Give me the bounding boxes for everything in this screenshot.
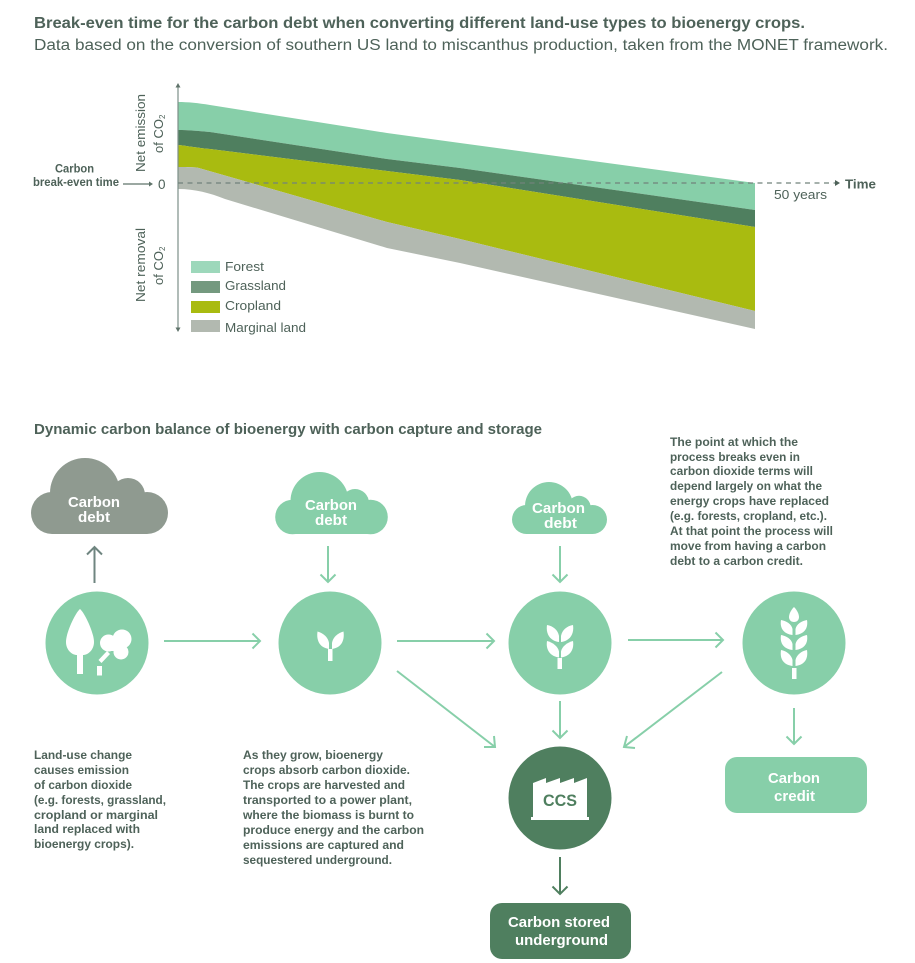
arrow: mature crop to CCS xyxy=(624,672,722,748)
text: bioenergy crops explanation: transported to a power plant, xyxy=(243,793,412,807)
box: carbon credit: Carbon xyxy=(768,770,820,787)
area: forest xyxy=(178,102,755,210)
cloud: grey carbon debt xyxy=(31,458,168,534)
cloud: small carbon debt: debt xyxy=(544,515,577,532)
axis label: of CO2 lower: of CO xyxy=(151,251,166,285)
legend: Cropland xyxy=(225,298,281,313)
cloud: grey carbon debt: Carbon xyxy=(68,494,120,511)
subtitle: data source: Data based on the conversion of southern US land to miscanthus production, taken from the MONET framework. xyxy=(34,37,888,54)
arrow: cloud to young crop xyxy=(552,546,568,582)
arrow: young crop to CCS xyxy=(552,701,568,738)
box: carbon credit: credit xyxy=(774,788,815,805)
cloud: medium carbon debt xyxy=(275,472,388,534)
text: break-even point explanation: move from having a carbon xyxy=(670,539,826,553)
text: break-even point explanation: debt to a carbon credit. xyxy=(670,554,803,568)
text: break-even point explanation xyxy=(670,435,833,568)
axis label: net emission: Net emission xyxy=(133,94,148,172)
label: carbon break-even time: break-even time xyxy=(33,175,119,189)
arrow: seedling to CCS xyxy=(397,671,495,747)
text: land-use change explanation: land replaced with xyxy=(34,822,140,836)
box: carbon stored underground: underground xyxy=(515,932,608,949)
text: bioenergy crops explanation xyxy=(242,748,424,867)
text: bioenergy crops explanation: where the biomass is burnt to xyxy=(242,808,414,822)
label: zero: 0 xyxy=(158,177,166,192)
text: bioenergy crops explanation: produce energy and the carbon xyxy=(243,823,424,837)
arrow: CCS to stored underground xyxy=(552,857,568,894)
text: land-use change explanation: causes emission xyxy=(34,763,129,777)
legend: Forest xyxy=(225,259,264,274)
text: bioenergy crops explanation: emissions are captured and xyxy=(243,838,404,852)
legend: Marginal land xyxy=(225,320,306,335)
arrow: land use to seedling xyxy=(164,634,260,648)
heading: dynamic carbon balance: Dynamic carbon balance of bioenergy with carbon capture and storage xyxy=(34,421,542,438)
arrow: mature crop to carbon credit xyxy=(786,708,802,744)
text: land-use change explanation: of carbon dioxide xyxy=(34,778,132,792)
text: bioenergy crops explanation: As they grow, bioenergy xyxy=(243,748,383,762)
text: break-even point explanation: (e.g. forests, cropland, etc.). xyxy=(670,509,827,523)
label: carbon break-even time xyxy=(33,162,153,189)
area: marginal land xyxy=(178,167,755,329)
text: land-use change explanation xyxy=(34,748,166,851)
cloud: medium carbon debt: Carbon xyxy=(305,497,357,514)
arrow: cloud to seedling xyxy=(320,546,336,582)
text: land-use change explanation: Land-use change xyxy=(34,748,132,762)
label: carbon break-even time: Carbon xyxy=(55,162,94,176)
zero line and time axis xyxy=(178,180,840,186)
arrow: land use to grey cloud xyxy=(87,547,102,583)
legend xyxy=(191,259,306,335)
label: 50 years: 50 years xyxy=(774,187,828,202)
icon: young crop in circle xyxy=(508,592,612,694)
icon: mature crop in circle xyxy=(742,592,846,694)
box: carbon credit xyxy=(725,757,867,813)
text: land-use change explanation: (e.g. forests, grassland, xyxy=(34,793,166,807)
text: break-even point explanation: carbon dioxide terms will xyxy=(670,464,813,478)
cloud: medium carbon debt: debt xyxy=(315,512,347,529)
text: break-even point explanation: energy crops have replaced xyxy=(670,494,829,508)
box: carbon stored underground: Carbon stored xyxy=(508,914,610,931)
cloud: grey carbon debt: debt xyxy=(78,509,110,526)
arrow: young crop to mature crop xyxy=(628,632,723,648)
text: break-even point explanation: process breaks even in xyxy=(670,450,800,464)
area: cropland xyxy=(178,145,755,311)
label: time: Time xyxy=(845,176,876,192)
axis label: of CO2 lower: 2 xyxy=(158,246,167,251)
text: bioenergy crops explanation: sequestered underground. xyxy=(243,853,392,867)
text: break-even point explanation: depend largely on what the xyxy=(670,479,822,493)
box: carbon stored underground xyxy=(490,903,631,959)
text: break-even point explanation: At that point the process will xyxy=(670,524,833,538)
axis label: of CO2 upper: of CO xyxy=(151,119,166,153)
axis label: net removal: Net removal xyxy=(133,228,148,302)
text: land-use change explanation: cropland or marginal xyxy=(34,808,158,822)
area chart: carbon debt break-even xyxy=(33,83,876,335)
text: break-even point explanation: The point at which the xyxy=(670,435,798,449)
icon: seedling in circle xyxy=(278,592,382,694)
vertical axis xyxy=(176,83,180,332)
text: bioenergy crops explanation: The crops are harvested and xyxy=(243,778,405,792)
cloud: small carbon debt xyxy=(512,482,607,534)
icon: CCS factory in circle: CCS xyxy=(543,792,577,810)
area: grassland xyxy=(178,130,755,227)
icon: CCS factory in circle xyxy=(508,746,612,850)
legend: Grassland xyxy=(225,278,286,293)
title: chart heading: Break-even time for the carbon debt when converting different land-use types to bioenergy crops. xyxy=(34,15,805,32)
text: bioenergy crops explanation: crops absorb carbon dioxide. xyxy=(243,763,410,777)
arrow: seedling to young crop xyxy=(397,634,494,648)
cloud: small carbon debt: Carbon xyxy=(532,500,585,517)
axis label: of CO2 upper: 2 xyxy=(158,114,167,119)
text: land-use change explanation: bioenergy crops). xyxy=(34,837,134,851)
icon: trees in circle xyxy=(46,592,148,694)
